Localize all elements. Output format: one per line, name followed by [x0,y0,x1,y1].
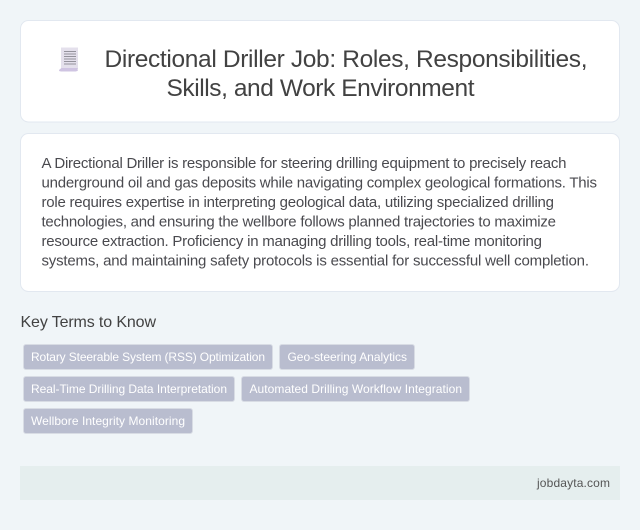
heading: key terms: Key Terms to Know [20,314,156,331]
footer bar [20,466,620,500]
panel: title card [20,20,620,122]
tag: rotary steerable system [24,344,272,370]
tag: rotary steerable system: Rotary Steerable System (RSS) Optimization [31,350,265,364]
text block: job description: resource extraction. Proficiency in managing drilling tools, real-time monitoring [42,233,542,250]
tag: automated drilling workflow: Automated Drilling Workflow Integration [250,382,462,396]
tag: wellbore integrity: Wellbore Integrity Monitoring [31,414,185,428]
text block: job description: underground oil and gas deposits while navigating complex geological formations. This [42,174,597,192]
text block: job description: A Directional Driller is responsible for steering drilling equipment to precisely reach [42,155,566,172]
tag: wellbore integrity [24,408,192,434]
title [104,46,588,102]
text block: job description: role requires expertise in interpreting geological data, utilizing specialized drilling [42,194,554,211]
footer text: source: jobdayta.com [536,476,610,490]
tag: geo-steering analytics [280,344,414,370]
tag list: key terms [24,344,470,434]
icon: scroll document [59,48,78,72]
tag: real-time drilling data: Real-Time Drilling Data Interpretation [31,382,227,396]
text block: job description: systems, and maintaining safety protocols is essential for successful well completion. [42,252,589,270]
panel: description [20,134,620,292]
tag: real-time drilling data [24,376,234,402]
tag: geo-steering analytics: Geo-steering Analytics [288,350,407,364]
title: Skills, and Work Environment [166,75,475,102]
text block: job description [42,155,597,270]
text block: job description: technologies, and ensuring the wellbore follows planned trajectories to maximize [42,214,556,230]
title: Directional Driller Job: Roles, Responsibilities, [104,46,588,73]
tag: automated drilling workflow [242,376,470,402]
